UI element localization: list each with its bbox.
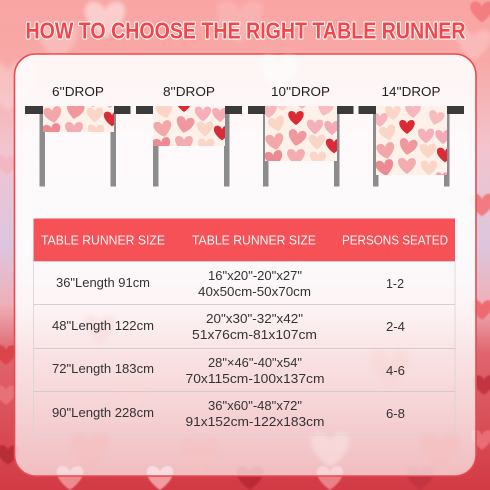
drop label: 10 inch: 10''DROP	[271, 84, 330, 99]
table header: PERSONS SEATED	[342, 234, 448, 248]
row 3: 72"Length 183cm	[52, 362, 154, 376]
drop label: 8 inch: 8''DROP	[163, 84, 215, 99]
row 4	[52, 399, 405, 429]
drop diagram: 8 inch	[136, 87, 242, 186]
row 3	[52, 356, 405, 386]
row 2: 20"x30"-32"x42"	[206, 312, 303, 326]
row 4: 6-8	[386, 407, 405, 421]
size table	[34, 218, 455, 435]
row 2: 2-4	[386, 320, 405, 334]
row 4: 36"x60"-48"x72"	[208, 399, 302, 413]
row 4: 90"Length 228cm	[52, 406, 154, 420]
row 4: 91x152cm-122x183cm	[186, 415, 324, 429]
row 3: 70x115cm-100x137cm	[186, 372, 324, 386]
row 3: 28"×46"-40"x54"	[208, 356, 302, 370]
row 1	[56, 269, 404, 299]
row 2: 51x76cm-81x107cm	[192, 328, 317, 342]
row 1: 1-2	[386, 277, 404, 291]
row 1: 40x50cm-50x70cm	[198, 285, 311, 299]
row 1: 16"x20"-20"x27"	[208, 269, 302, 283]
table header	[34, 218, 455, 262]
drop diagram: 6 inch	[25, 87, 130, 186]
drop label: 6 inch: 6''DROP	[52, 84, 104, 99]
row 3: 4-6	[386, 364, 405, 378]
drop diagram: 14 inch	[358, 87, 464, 186]
drop label: 14 inch: 14''DROP	[382, 84, 440, 99]
row 2: 48"Length 122cm	[52, 319, 154, 333]
table grid	[34, 262, 455, 435]
table header: TABLE RUNNER SIZE	[41, 234, 165, 248]
row 1: 36"Length 91cm	[56, 276, 150, 290]
row 2	[52, 312, 405, 342]
table header: TABLE RUNNER SIZE	[192, 234, 316, 248]
drop diagram: 10 inch	[248, 87, 354, 186]
